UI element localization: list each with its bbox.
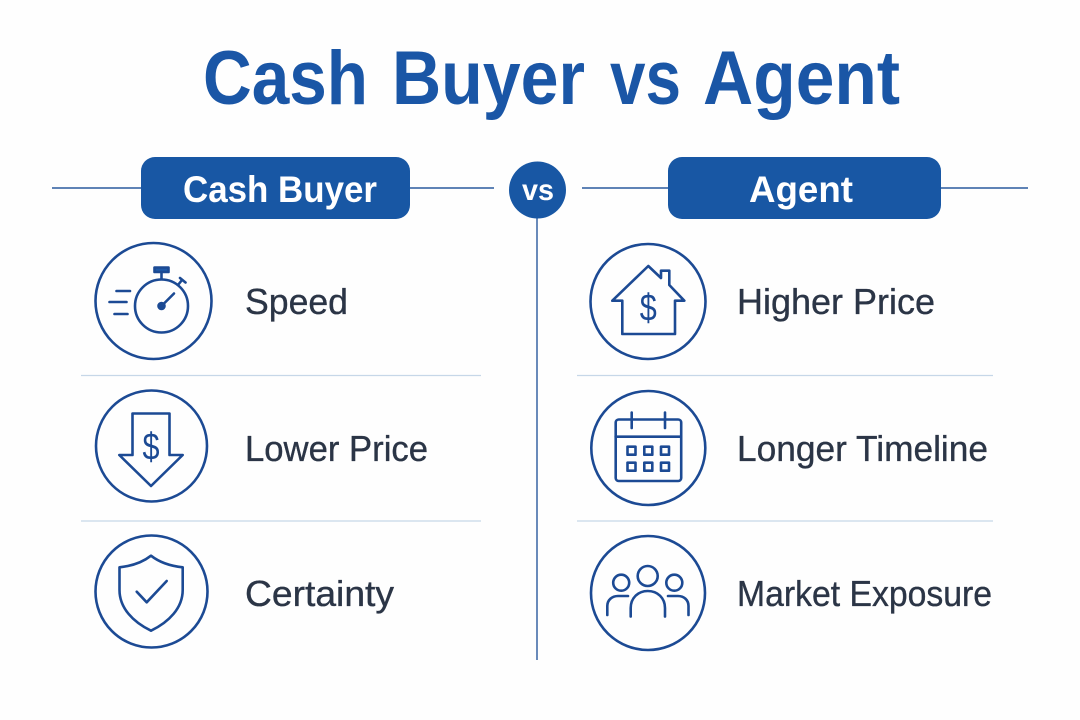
title: Buyer [392, 36, 585, 121]
label: Market Exposure: Market Exposure [737, 573, 992, 614]
label: Speed: Speed [245, 281, 348, 322]
label: Certainty: Certainty [245, 573, 394, 614]
icon: house with dollar [590, 244, 706, 359]
icon: people group [591, 536, 705, 650]
label: Longer Timeline: Longer Timeline [737, 428, 988, 469]
label: Lower Price: Lower Price [245, 428, 428, 469]
heading: Agent: Agent [749, 169, 853, 210]
vs badge [509, 162, 566, 218]
title: Agent [703, 36, 900, 121]
icon: calendar [591, 391, 705, 505]
heading: Agent [668, 157, 941, 219]
vs badge: vs [522, 174, 554, 207]
title [203, 36, 900, 121]
icon: down arrow with dollar [96, 390, 207, 502]
heading: Cash Buyer [141, 157, 410, 219]
icon: down arrow with dollar: $ [142, 426, 160, 468]
title: Cash [203, 36, 368, 121]
icon: house with dollar: $ [640, 288, 657, 330]
title: vs [610, 36, 681, 121]
heading: Cash Buyer: Cash Buyer [183, 169, 377, 210]
label: Higher Price: Higher Price [737, 281, 935, 322]
icon: shield with check [96, 536, 208, 648]
icon: stopwatch [96, 243, 212, 359]
